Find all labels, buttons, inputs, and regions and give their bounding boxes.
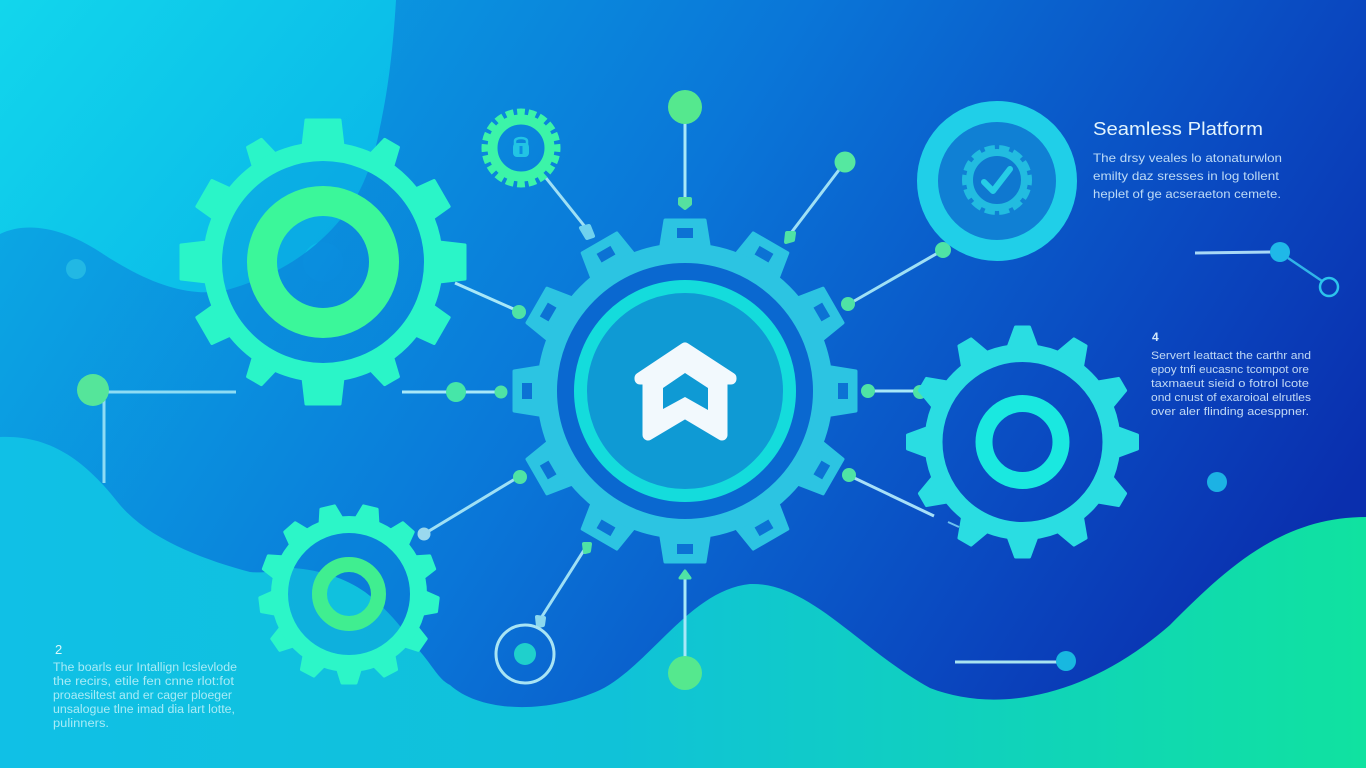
text block: Seamless Platform: [1093, 119, 1282, 201]
connector: small gear to hub: [546, 178, 593, 238]
body text: ond cnust of exaroioal elrutles: [1151, 392, 1312, 404]
text block: right note: [1151, 330, 1312, 418]
connector: far left node: [77, 374, 236, 483]
body text: The boarls eur Intallign lcslevlode: [53, 662, 237, 674]
connector lines and nodes: [66, 90, 1338, 690]
background wave: top left: [0, 0, 396, 292]
gear: bottom left: [259, 505, 439, 683]
dot: left background: [66, 259, 86, 279]
connector: upper right node: [786, 152, 856, 242]
gear: large left: [181, 120, 465, 404]
text block: bottom left note: [53, 642, 237, 730]
body text: Servert leattact the carthr and: [1151, 350, 1311, 362]
connector: lower left: [418, 470, 527, 540]
gear: central hub: [514, 220, 856, 562]
heading: Seamless Platform: [1093, 119, 1263, 139]
gear: right: [908, 327, 1138, 557]
body text: over aler flinding acesppner.: [1151, 406, 1309, 418]
connector: bottom node: [668, 571, 702, 690]
body text: The drsy veales lo atonaturwlon: [1093, 151, 1282, 165]
body text: pulinners.: [53, 718, 109, 730]
body text: emilty daz sresses in log tollent: [1093, 169, 1280, 183]
body text: [53, 662, 237, 730]
body text: [1093, 151, 1282, 201]
connector: big gear to hub: [455, 283, 526, 319]
badge: check gear: [928, 112, 1066, 250]
gear: small top with lock: [485, 112, 557, 184]
connector: badge to hub: [841, 242, 951, 311]
background wave: bottom: [0, 437, 1366, 768]
dot: right: [1207, 472, 1227, 492]
icon: lock: [513, 138, 529, 157]
connector: top right decoration: [1195, 242, 1338, 296]
body text: [1151, 350, 1312, 418]
body text: unsalogue tlne imad dia lart lotte,: [53, 704, 235, 716]
connector: bottom right: [955, 651, 1076, 671]
connector: middle left: [402, 382, 508, 402]
number: 4: [1152, 330, 1159, 344]
connector: top node: [668, 90, 702, 208]
body text: the recirs, etile fen cnne rlot:fot: [53, 676, 235, 688]
body text: heplet of ge acseraeton cemete.: [1093, 187, 1281, 201]
icon: house: [640, 348, 731, 435]
icon: gear with check mark: [964, 148, 1030, 212]
number: 2: [55, 642, 62, 657]
body text: taxmaeut sieid o fotrol lcote: [1151, 378, 1309, 390]
body text: proaesiltest and er cager ploeger: [53, 690, 232, 702]
body text: epoy tnfi eucasnc tcompot ore: [1151, 364, 1309, 376]
connector: right gear to hub: [861, 384, 927, 399]
connector: lower right: [842, 468, 959, 527]
connector: ring node bottom: [496, 544, 590, 683]
